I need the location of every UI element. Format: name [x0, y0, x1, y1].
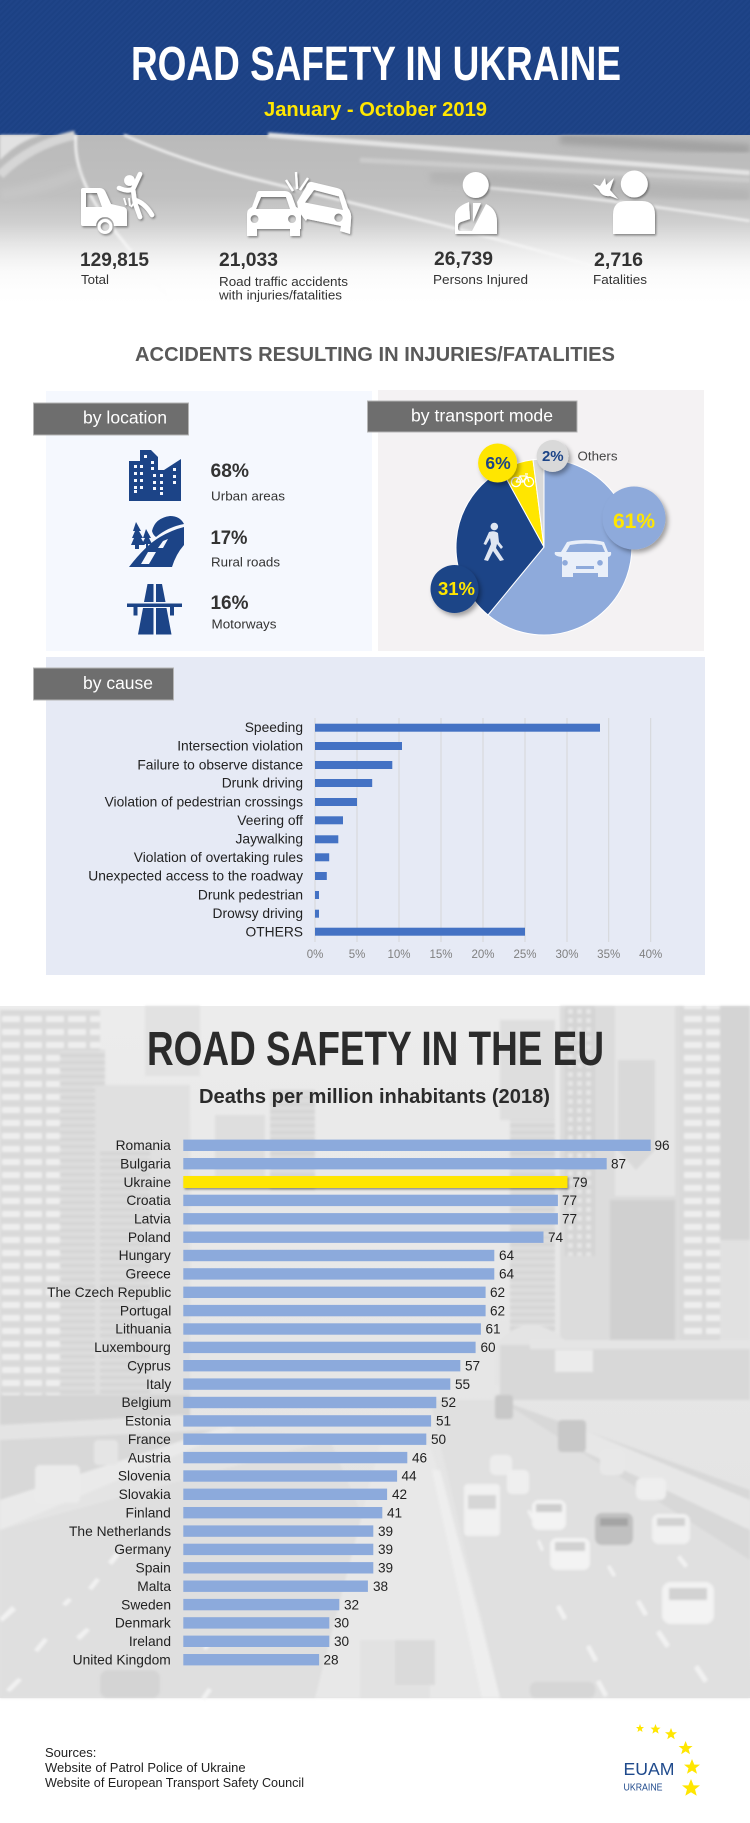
sources: Website of European Transport Safety Council [45, 1775, 304, 1790]
text: urban areas: 68% [210, 460, 249, 482]
bar chart: causes: 30% [555, 949, 579, 961]
callout: 31% pedestrians: 31% [438, 578, 475, 599]
callout: 6% cyclists [478, 444, 517, 482]
title: road safety in the EU: ROAD SAFETY IN THE EU [147, 1023, 604, 1076]
road photo background [0, 135, 750, 310]
bar chart: deaths per million by country: Germany [114, 1542, 171, 1557]
stat: total: Total [81, 272, 109, 287]
heading: accidents: ACCIDENTS RESULTING IN INJURIES/FATALITIES [135, 344, 615, 366]
bar chart: deaths per million by country: Slovenia [118, 1469, 171, 1484]
bar chart: deaths per million by country: Slovakia [119, 1487, 171, 1502]
icon: motorway [127, 584, 182, 634]
bar chart: deaths per million by country: Austria [128, 1450, 171, 1465]
bar chart: deaths per million by country: 42 [392, 1487, 407, 1502]
stat: total: 129,815 [80, 249, 149, 271]
icon: pedestrian [484, 523, 504, 561]
stat: road traffic accidents: Road traffic accidents [219, 274, 349, 289]
bar chart: deaths per million by country: The Czech Republic [47, 1285, 171, 1300]
bar chart: deaths per million by country: 41 [387, 1505, 402, 1520]
subtitle: period: January - October 2019 [264, 98, 487, 121]
label: by transport mode: by transport mode [411, 406, 553, 426]
bar chart: causes: 15% [429, 949, 453, 961]
panel: by location [34, 391, 372, 651]
bar chart: deaths per million by country: 46 [412, 1450, 427, 1465]
bar chart: causes: Drunk driving [222, 776, 303, 790]
icon: injured person with sling [455, 172, 497, 234]
bar chart: deaths per million by country: 62 [490, 1303, 505, 1318]
bar chart: deaths per million by country: 44 [402, 1469, 417, 1484]
stat: road traffic accidents [218, 249, 349, 302]
label: by location: by location [83, 408, 167, 428]
icon: car [555, 540, 611, 577]
text: motorways [210, 592, 277, 632]
bar chart: deaths per million by country [47, 1138, 670, 1667]
bar chart: deaths per million by country: 39 [378, 1524, 393, 1539]
bar chart: deaths per million by country: Estonia [125, 1414, 171, 1429]
bar chart: deaths per million by country: Ukraine [123, 1175, 171, 1190]
bar chart: deaths per million by country: 62 [490, 1285, 505, 1300]
bar chart: deaths per million by country: 87 [611, 1156, 626, 1171]
bar chart: causes: Violation of overtaking rules [134, 850, 303, 865]
bar chart: deaths per million by country: Luxembourg [94, 1340, 171, 1355]
bar chart: deaths per million by country: Hungary [119, 1248, 171, 1263]
sources: Sources: [45, 1745, 96, 1760]
callout: 31% pedestrians [430, 565, 478, 613]
title: ROAD SAFETY IN UKRAINE [131, 38, 621, 91]
text: motorways: 16% [210, 592, 248, 614]
city and highway photo background [0, 1006, 750, 1700]
label: by cause [34, 668, 174, 700]
bar chart: causes: Veering off [237, 813, 303, 828]
bar chart: causes: Jaywalking [236, 832, 303, 846]
bar chart: deaths per million by country: Croatia [126, 1193, 171, 1208]
bar chart: deaths per million by country: 57 [465, 1358, 480, 1373]
stat: persons injured: 26,739 [434, 248, 493, 270]
bar chart: deaths per million by country: The Netherlands [69, 1524, 171, 1539]
bar chart: causes: 10% [387, 949, 411, 961]
stat: persons injured: Persons Injured [433, 272, 528, 287]
bar chart: deaths per million by country: 38 [373, 1579, 388, 1594]
bar chart: deaths per million by country: 51 [436, 1414, 451, 1429]
bar chart: deaths per million by country: Greece [126, 1267, 171, 1282]
callout: 2% others: Others [578, 448, 618, 464]
panel: by transport mode [368, 390, 704, 651]
bar chart: deaths per million by country: Cyprus [127, 1358, 171, 1373]
label: by transport mode [368, 401, 577, 432]
subtitle: deaths per million: Deaths per million inhabitants (2018) [199, 1086, 550, 1108]
bar chart: deaths per million by country: Latvia [134, 1212, 171, 1226]
logo: EUAM Ukraine [624, 1724, 700, 1796]
callout: 2% others: 2% [542, 448, 564, 465]
bar chart: deaths per million by country: Sweden [121, 1597, 171, 1612]
bar chart: deaths per million by country: France [128, 1432, 171, 1447]
bar chart: deaths per million by country: Bulgaria [120, 1156, 171, 1171]
bar chart: deaths per million by country: 39 [378, 1542, 393, 1557]
bar chart: deaths per million by country: 32 [344, 1597, 359, 1612]
bar chart: deaths per million by country: Malta [137, 1579, 171, 1594]
callout: 61% cars [602, 486, 666, 550]
panel: by cause [34, 657, 705, 975]
stat: road traffic accidents: with injuries/fatalities [218, 288, 343, 302]
bar chart: causes: 25% [513, 949, 537, 961]
sources: Website of Patrol Police of Ukraine [45, 1760, 246, 1775]
label: by cause: by cause [83, 673, 153, 693]
logo: EUAM Ukraine: EUAM [624, 1759, 674, 1779]
label: by location [34, 403, 188, 435]
bar chart: causes: 5% [349, 949, 365, 961]
bar chart: deaths per million by country: 74 [548, 1230, 564, 1245]
text: motorways: Motorways [212, 616, 277, 632]
bar chart: deaths per million by country: 77 [562, 1193, 577, 1208]
icon: two-car collision [247, 172, 351, 236]
bar chart: causes: 40% [639, 949, 662, 961]
stat: persons injured [433, 248, 528, 287]
stat: road traffic accidents: 21,033 [219, 249, 278, 271]
icon: person with dove (fatalities) [593, 170, 655, 234]
bar chart: deaths per million by country: 61 [486, 1322, 501, 1337]
text: rural roads [210, 527, 281, 570]
bar chart: deaths per million by country: Belgium [121, 1395, 171, 1410]
bar chart: deaths per million by country: Portugal [120, 1303, 171, 1318]
bar chart: deaths per million by country: Ireland [129, 1634, 171, 1649]
icon: truck hitting pedestrian [81, 174, 152, 232]
icon: rural road [129, 516, 184, 567]
bar chart: causes: Unexpected access to the roadway [88, 868, 303, 884]
bar chart: deaths per million by country: 64 [499, 1267, 515, 1282]
bar chart: deaths per million by country: 30 [334, 1616, 350, 1631]
icon: city [129, 450, 181, 501]
bar chart: causes: Failure to observe distance [137, 758, 303, 772]
icon: bicycle [511, 474, 534, 487]
callout: 61% cars: 61% [613, 510, 655, 533]
bar chart: deaths per million by country: 96 [654, 1138, 670, 1153]
bar chart: causes: Drunk pedestrian [198, 888, 303, 902]
callout: 6% cyclists: 6% [485, 453, 511, 473]
bar chart: causes: Speeding [245, 720, 303, 735]
text: urban areas [210, 460, 286, 504]
bar chart: deaths per million by country: Poland [128, 1230, 171, 1245]
bar chart: deaths per million by country: 30 [334, 1634, 350, 1649]
bar chart: deaths per million by country: Lithuania [115, 1322, 172, 1337]
bar chart: deaths per million by country: Spain [136, 1560, 171, 1576]
bar chart: deaths per million by country: 77 [562, 1212, 577, 1226]
bar chart: causes [88, 718, 662, 961]
bar chart: causes: OTHERS [246, 924, 303, 940]
bar chart: causes: Drowsy driving [213, 906, 303, 921]
text: urban areas: Urban areas [211, 488, 286, 504]
bar chart: deaths per million by country: Finland [126, 1505, 171, 1520]
bar chart: causes: 0% [307, 949, 323, 961]
bar chart: deaths per million by country: 52 [441, 1395, 456, 1410]
bar chart: deaths per million by country: 50 [431, 1432, 447, 1447]
bar chart: deaths per million by country: 55 [455, 1377, 470, 1392]
stat: fatalities [593, 249, 648, 287]
callout: 2% others [537, 440, 618, 472]
bar chart: deaths per million by country: 39 [378, 1560, 393, 1576]
bar chart: deaths per million by country: United Kingdom [73, 1652, 171, 1667]
text: rural roads: 17% [210, 527, 248, 549]
bar chart: deaths per million by country: 79 [572, 1175, 588, 1190]
bar chart: deaths per million by country: Romania [116, 1138, 171, 1153]
bar chart: deaths per million by country: 28 [324, 1652, 339, 1667]
bar chart: causes: Intersection violation [177, 738, 303, 754]
stat: total [80, 249, 149, 287]
sources [45, 1745, 304, 1790]
bar chart: causes: 35% [597, 949, 620, 961]
pie chart [456, 459, 632, 635]
stat: fatalities: Fatalities [593, 272, 648, 287]
stat: fatalities: 2,716 [594, 249, 643, 271]
header banner [0, 0, 750, 135]
logo: EUAM Ukraine: UKRAINE [624, 1783, 663, 1794]
bar chart: causes: 20% [471, 949, 495, 961]
text: rural roads: Rural roads [211, 554, 281, 570]
bar chart: deaths per million by country: Italy [146, 1377, 171, 1392]
highlighted bar: Ukraine [183, 1176, 568, 1188]
bar chart: deaths per million by country: 64 [499, 1248, 515, 1263]
bar chart: causes: Violation of pedestrian crossings [105, 794, 303, 810]
bar chart: deaths per million by country: Denmark [115, 1616, 171, 1631]
bar chart: deaths per million by country: 60 [480, 1340, 496, 1355]
